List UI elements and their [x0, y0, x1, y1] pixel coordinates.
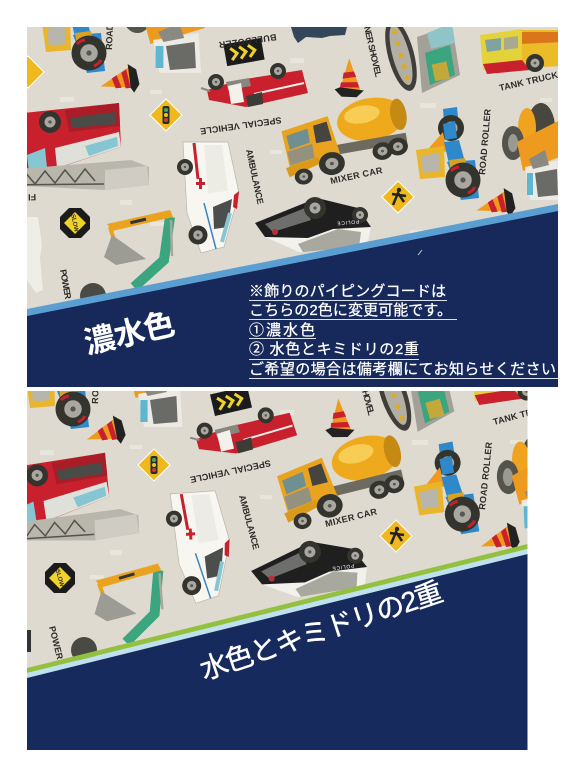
icon: red special vehicle	[201, 63, 308, 107]
vehicle labels: ROAD ROLLER	[477, 108, 493, 175]
vehicle labels: HOVEL	[360, 389, 377, 417]
icon: top vehicle	[291, 27, 347, 43]
icon: traffic cone left	[87, 416, 126, 444]
icon: tank truck	[474, 391, 528, 405]
icon: chevron sign	[210, 391, 252, 416]
icon: excavator	[92, 563, 165, 644]
icon: wheel loader	[495, 434, 563, 535]
vehicle labels	[28, 23, 559, 300]
icon: fire ladder truck	[27, 103, 149, 190]
icon: traffic cone right	[478, 521, 521, 555]
icon: police car	[255, 197, 371, 252]
vehicle labels: ROAD	[104, 23, 115, 50]
icon: slow sign: SLOW	[69, 214, 79, 233]
panel: 水色とキミドリの2重 piping sample	[27, 391, 528, 750]
icon: ambulance	[164, 490, 234, 605]
blue piping cord	[27, 204, 558, 316]
icon: left edge vehicle	[27, 217, 43, 293]
icon: tank truck	[480, 29, 565, 74]
vehicle labels: TANK TRUCK	[498, 70, 559, 93]
vehicle labels: NER SHOVEL	[362, 25, 384, 79]
icon: crawler tread	[71, 637, 97, 663]
navy fabric	[27, 209, 558, 387]
icon: left edge vehicle	[27, 630, 31, 652]
icon: power shovel	[379, 391, 454, 432]
vehicle labels: AMBULANCE	[244, 148, 265, 205]
icon: chevron sign	[223, 38, 265, 66]
vehicle labels: SPECIAL VEHICLE	[189, 458, 272, 485]
icon: ambulance	[177, 142, 239, 253]
icon: worker sign	[380, 520, 412, 552]
icon: road roller	[416, 107, 480, 200]
vehicle labels	[47, 389, 553, 661]
vehicle labels: FI	[28, 192, 36, 202]
icon: slow sign	[45, 563, 75, 593]
icon: fire ladder truck	[27, 452, 140, 540]
scratch mark	[418, 250, 422, 255]
icon: wheel loader	[502, 103, 558, 200]
text block: piping note: ①濃水色	[249, 322, 315, 339]
icon: red special vehicle	[190, 407, 298, 454]
icon: traffic light sign	[138, 449, 170, 481]
icon: slow sign: SLOW	[54, 569, 64, 588]
text block: piping note	[249, 283, 558, 378]
vehicle labels: BULLDOZER	[218, 32, 277, 50]
icon: power shovel	[385, 27, 460, 93]
vehicle labels: POWER	[47, 625, 65, 661]
vehicle labels: MIXER CAR	[324, 506, 378, 529]
icon: police car	[249, 537, 369, 600]
icon: crawler tread	[80, 283, 106, 298]
navy fabric	[27, 554, 528, 750]
icon: mixer truck	[282, 98, 408, 184]
text block: piping note: ※飾りのパイピングコードは	[249, 283, 446, 300]
light blue piping cord	[27, 549, 528, 678]
vehicle labels: POWER	[58, 269, 73, 300]
fabric background	[27, 391, 528, 673]
vehicle labels: POLICE	[336, 218, 359, 226]
icon: traffic cone right	[476, 188, 516, 214]
panel: 濃水色 piping sample	[27, 27, 558, 387]
text block: piping note: こちらの2色に変更可能です。	[249, 302, 452, 319]
green piping cord	[27, 544, 528, 673]
vehicle labels: TANK TRUCK	[492, 402, 553, 427]
vehicle labels: ROAD ROLLER	[477, 441, 494, 510]
icon: bulldozer	[134, 391, 182, 427]
heading: 濃水色: 濃水色	[81, 306, 178, 361]
icon: traffic cone left	[100, 64, 140, 93]
icon: slow sign	[60, 208, 90, 238]
vehicle labels: AMBULANCE	[237, 494, 261, 551]
text block: piping note: ② 水色とキミドリの2重	[249, 341, 419, 358]
icon: left edge sign	[27, 56, 44, 88]
vehicle labels: POLICE	[331, 562, 355, 571]
icon: mixer truck	[271, 428, 413, 533]
icon: traffic cone upright	[325, 398, 354, 438]
vehicle labels: RO	[90, 390, 100, 404]
icon: roller vehicle top left	[42, 27, 106, 73]
heading: 水色とキミドリの2重: 水色とキミドリの2重	[196, 576, 447, 686]
icon: excavator	[104, 210, 173, 287]
vehicle labels: MIXER CAR	[329, 165, 384, 186]
icon: roller vehicle top left	[28, 391, 90, 429]
icon: worker sign	[382, 181, 414, 213]
icon: road roller	[412, 440, 481, 537]
icon: traffic cone upright	[334, 58, 364, 98]
icon: traffic light sign	[150, 99, 182, 131]
vehicle labels: SPECIAL VEHICLE	[200, 115, 282, 136]
icon: bulldozer	[126, 27, 205, 73]
fabric background	[27, 27, 558, 309]
text block: piping note: ご希望の場合は備考欄にてお知らせください	[249, 361, 556, 378]
